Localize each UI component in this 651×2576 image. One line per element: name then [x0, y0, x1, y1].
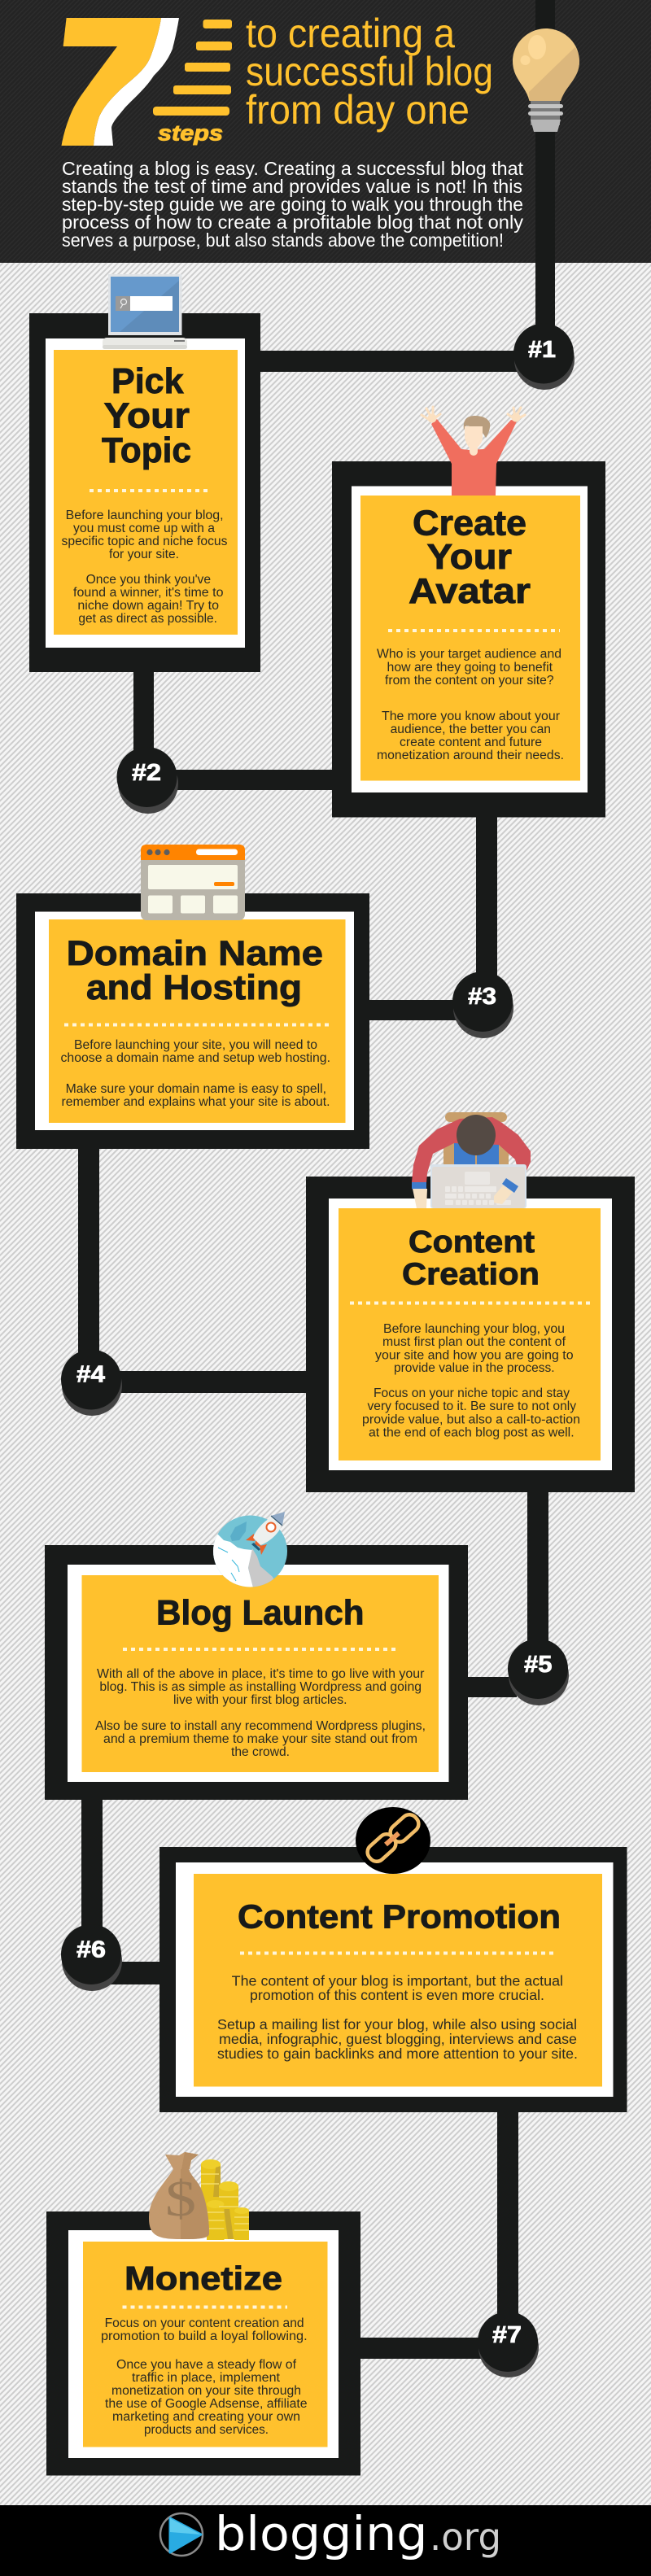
intro text: step-by-step guide we are going to walk you through the — [62, 194, 523, 215]
step 7 body text: marketing and creating your own — [112, 2410, 300, 2424]
step 1 heading: Topic — [102, 430, 191, 470]
step 2 body text: monetization around their needs. — [377, 749, 564, 762]
step 4 body text: your site and how you are going to — [375, 1349, 574, 1362]
step 1 heading: Pick — [111, 361, 184, 401]
step 2 body text: create content and future — [400, 736, 542, 749]
step 5 body text: Also be sure to install any recommend Wordpress plugins, — [95, 1719, 426, 1733]
step 5 heading: Blog Launch — [156, 1593, 365, 1632]
step 1 heading: Your — [104, 395, 190, 436]
title — [246, 11, 493, 133]
icon: person at laptop from above — [412, 1112, 531, 1208]
step 2 body text: The more you know about your — [382, 709, 560, 723]
step 7 body text: Once you have a steady flow of — [116, 2358, 297, 2372]
step 2 body text: audience, the better you can — [391, 723, 551, 736]
logo wordmark: blogging — [215, 2506, 428, 2561]
big number 7 — [62, 18, 179, 146]
icon: money bag and coins — [149, 2152, 249, 2240]
step 3 heading: Domain Name — [67, 934, 323, 973]
step 6 body text: media, infographic, guest blogging, interviews and case — [219, 2031, 577, 2047]
step 4 body text: Before launching your blog, you — [383, 1322, 565, 1336]
step 7 body text: the use of Google Adsense, affiliate — [105, 2397, 308, 2411]
panel: step 1 pick your topic — [29, 313, 260, 672]
step 6 body text — [217, 1972, 578, 2062]
node: step 4 marker — [61, 1349, 122, 1416]
connectors between steps — [78, 0, 555, 2359]
icon: light bulb — [513, 28, 579, 132]
step 4 heading — [402, 1225, 540, 1292]
step 4 body text: provide value, but also a call-to-action — [362, 1412, 580, 1427]
step 4 body text: must first plan out the content of — [382, 1335, 566, 1349]
step 2 heading — [409, 503, 531, 611]
logo wordmark: .org — [430, 2515, 501, 2559]
icon: rocket launch — [212, 1512, 287, 1591]
intro text — [62, 158, 524, 251]
step 3 body text — [60, 1038, 330, 1109]
step 7 body text: promotion to build a loyal following. — [101, 2329, 308, 2343]
node: step 6 marker — [61, 1924, 122, 1991]
panel: step 4 content creation — [306, 1177, 635, 1492]
panel: step 2 create your avatar — [332, 461, 605, 817]
step 7 body text: products and services. — [144, 2423, 269, 2437]
step 1 body text: you must come up with a — [73, 522, 215, 535]
node: step 5 marker: #5 — [524, 1652, 552, 1678]
step 2 body text: how are they going to benefit — [387, 661, 553, 675]
step 5 body text: blog. This is as simple as installing Wordpress and going — [99, 1680, 422, 1694]
intro text: process of how to create a profitable blog that not only — [62, 212, 524, 233]
stair bars — [153, 20, 232, 116]
step 1 body text: Before launching your blog, — [66, 509, 224, 522]
step 1 body text: get as direct as possible. — [78, 612, 217, 626]
step 5 body text: live with your first blog articles. — [173, 1693, 347, 1707]
panel: step 3 domain name and hosting — [16, 893, 369, 1149]
step 4 body text: Focus on your niche topic and stay — [374, 1386, 570, 1400]
step 2 body text: from the content on your site? — [385, 674, 554, 688]
intro text: stands the test of time and provides value is not! In this — [62, 176, 522, 197]
step 1 body text: Once you think you've — [86, 573, 211, 587]
icon: laptop with search box — [103, 274, 187, 349]
step 4 body text: at the end of each blog post as well. — [369, 1426, 575, 1440]
step 7 body text — [101, 2316, 308, 2437]
node: step 2 marker: #2 — [132, 760, 161, 786]
step 6 body text: The content of your blog is important, but the actual — [232, 1972, 563, 1989]
step 1 body text: found a winner, it's time to — [73, 586, 223, 600]
footer — [0, 2505, 651, 2576]
step 2 body text: Who is your target audience and — [377, 648, 561, 661]
step 1 body text: for your site. — [109, 548, 179, 561]
step 4 body text: provide value in the process. — [394, 1361, 555, 1375]
intro text: Creating a blog is easy. Creating a successful blog that — [62, 158, 524, 179]
step 2 heading: Create — [413, 503, 526, 544]
node: step 2 marker — [117, 747, 178, 814]
node: step 3 marker — [452, 971, 513, 1038]
title: successful blog — [246, 49, 493, 94]
panel: step 7 monetize — [46, 2211, 360, 2475]
icon: person with raised arms — [422, 407, 525, 496]
title: to creating a — [246, 11, 455, 56]
step 7 body text: monetization on your site through — [111, 2384, 301, 2398]
step 2 heading: Avatar — [409, 571, 531, 611]
steps label: steps — [158, 120, 223, 145]
icon: browser window — [141, 845, 245, 920]
step 3 body text: Make sure your domain name is easy to spell, — [66, 1082, 326, 1096]
title: from day one — [246, 87, 470, 133]
node: step 1 marker: #1 — [528, 337, 556, 363]
step 5 body text — [95, 1667, 426, 1759]
intro text: serves a purpose, but also stands above the competition! — [62, 229, 504, 251]
step 2 body text — [377, 648, 564, 762]
panel: step 5 blog launch — [45, 1545, 468, 1800]
step 3 heading: and Hosting — [86, 968, 302, 1007]
node: step 4 marker: #4 — [76, 1362, 105, 1388]
panel: header — [0, 0, 651, 263]
step 4 heading: Creation — [402, 1258, 540, 1292]
step 7 body text: Focus on your content creation and — [105, 2316, 304, 2330]
step 5 body text: and a premium theme to make your site stand out from — [103, 1732, 417, 1746]
node: step 5 marker — [508, 1639, 569, 1705]
step 4 heading: Content — [409, 1225, 535, 1260]
step 6 body text: studies to gain backlinks and more attention to your site. — [217, 2046, 578, 2062]
node: step 1 marker — [513, 324, 575, 390]
step 6 heading: Content Promotion — [238, 1897, 561, 1935]
step 5 body text: With all of the above in place, it's time to go live with your — [97, 1667, 424, 1681]
step 2 heading: Your — [426, 537, 512, 577]
step 7 body text: traffic in place, implement — [132, 2371, 281, 2385]
step 6 body text: promotion of this content is even more crucial. — [250, 1987, 544, 2003]
icon: money bag and coins: $ — [165, 2172, 196, 2227]
step 1 heading — [102, 361, 191, 470]
step 3 body text: remember and explains what your site is about. — [62, 1095, 330, 1109]
step 4 body text — [362, 1322, 580, 1440]
step 4 body text: very focused to it. Be sure to not only — [368, 1399, 576, 1413]
step 3 body text: Before launching your site, you will need to — [74, 1038, 317, 1052]
panel: step 6 content promotion — [159, 1847, 627, 2112]
step 3 heading — [67, 934, 323, 1007]
step 6 body text: Setup a mailing list for your blog, while also using social — [217, 2016, 577, 2032]
icon: blogging.org logo — [160, 2513, 203, 2556]
step 5 body text: the crowd. — [231, 1745, 290, 1759]
node: step 3 marker: #3 — [468, 984, 496, 1010]
step 1 body text: niche down again! Try to — [77, 599, 219, 613]
step 3 body text: choose a domain name and setup web hosting. — [60, 1051, 330, 1065]
node: step 6 marker: #6 — [76, 1936, 106, 1963]
node: step 7 marker — [478, 2312, 539, 2377]
icon: chain link — [356, 1807, 430, 1874]
step 1 body text — [62, 509, 228, 626]
step 1 body text: specific topic and niche focus — [62, 535, 228, 548]
node: step 7 marker: #7 — [492, 2322, 522, 2348]
step 7 heading: Monetize — [125, 2259, 282, 2297]
